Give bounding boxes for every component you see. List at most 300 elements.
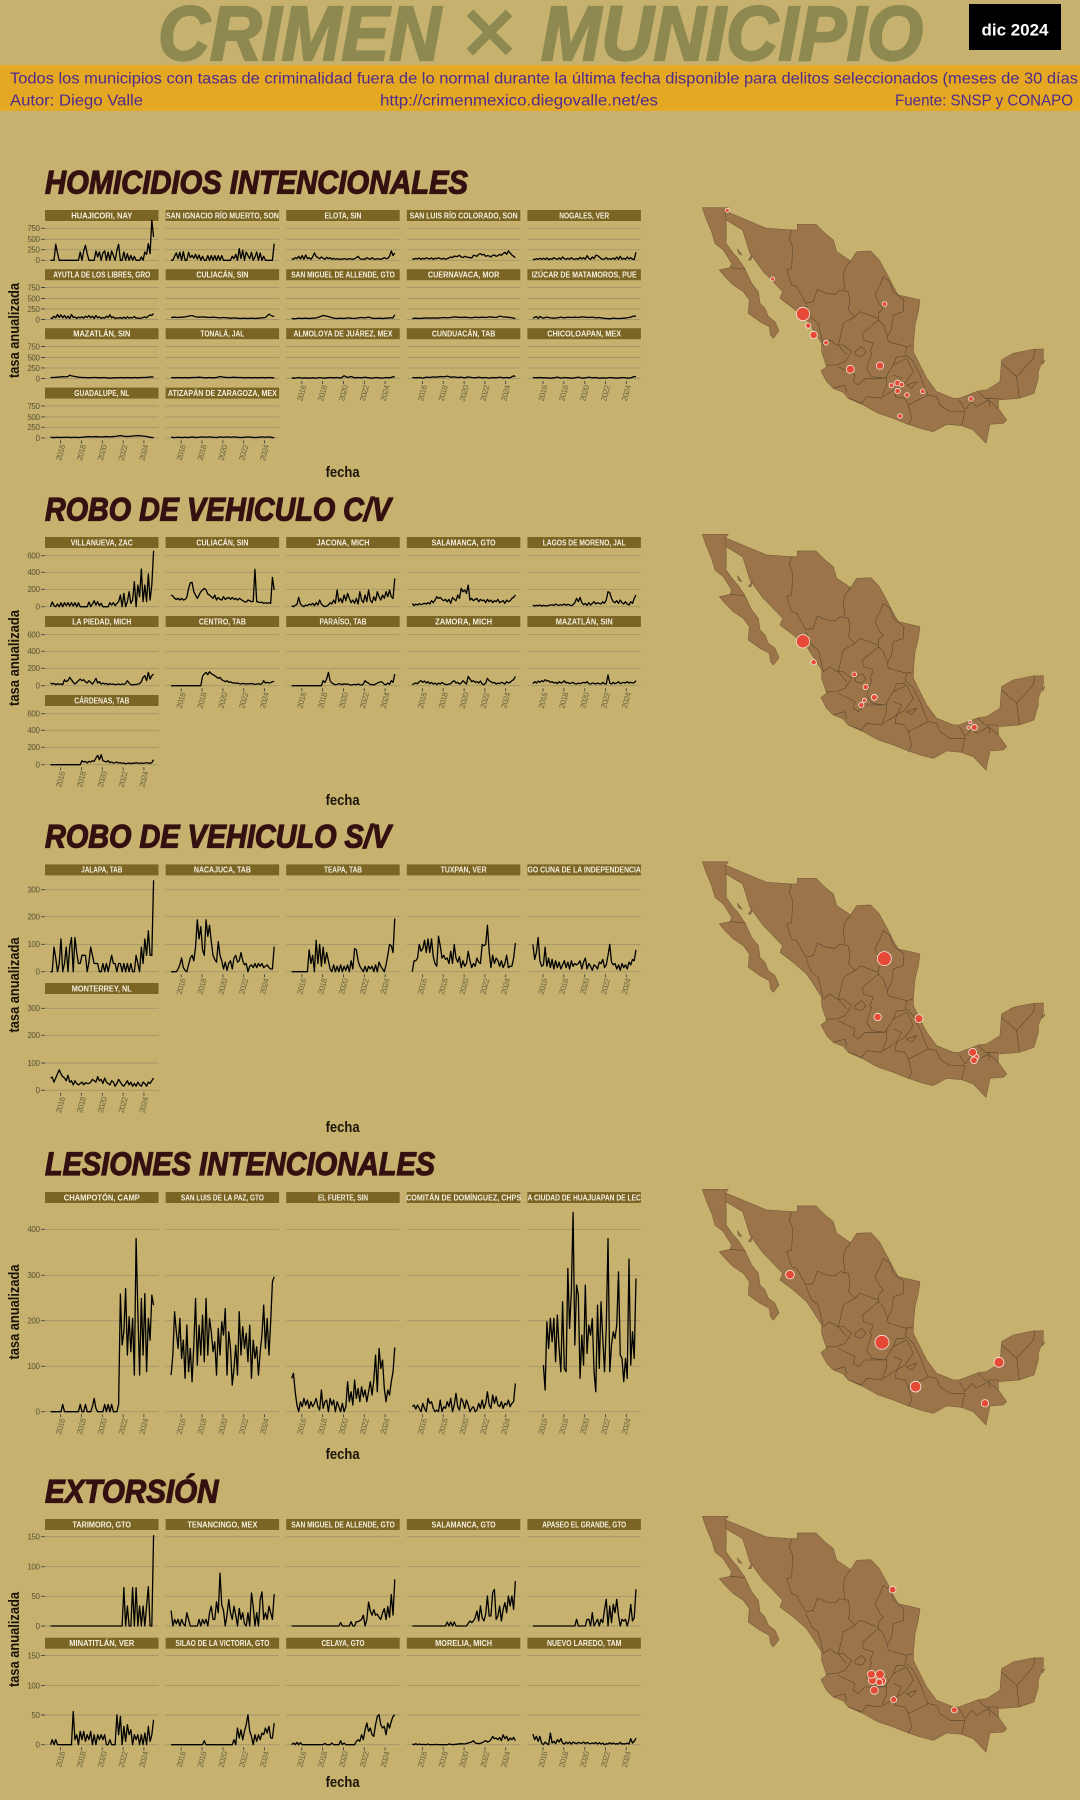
year axis [175,688,271,709]
year axis: 2020 [217,977,230,995]
y axis labels: 250 [27,246,40,255]
panel: Tarimoro [45,1519,158,1626]
year axis: 2016 [54,1417,67,1435]
heading: ROBO DE VEHICULO S/V [45,819,393,855]
section: lesiones intencionales [6,1146,1045,1463]
y axis labels: 200 [27,913,40,922]
year axis: 2022 [358,1417,371,1435]
year axis: 2018 [557,384,571,402]
year axis: 2018 [437,977,450,995]
panel: Tenancingo: TENANCINGO, MEX [187,1519,258,1529]
year axis: 2018 [75,770,88,788]
y axis labels: 750 [27,224,40,233]
y axis labels: 150 [27,1533,40,1542]
year axis [175,440,271,462]
year axis: 2018 [437,691,450,709]
panel: Silao de la Victoria: SILAO DE LA VICTORIA, GTO [175,1638,270,1648]
y axis labels [27,1225,45,1417]
panel: Apaseo el Grande: APASEO EL GRANDE, GTO [542,1519,626,1529]
year axis: 2020 [337,977,350,995]
year axis [54,1747,151,1768]
section: extorsión [6,1472,1045,1791]
panel: Zamora: ZAMORA, MICH [435,616,492,626]
year axis: 2018 [75,1417,88,1435]
y axis labels: 0 [35,968,40,977]
panel: San Luis Río Colorado: SAN LUIS RÍO COLORADO, SON [410,210,518,220]
panel: Salamanca: SALAMANCA, GTO [432,537,496,547]
year axis: 2020 [217,443,230,462]
panel: Tenancingo [166,1519,279,1626]
subtitle band [0,65,1080,111]
panel: Mazatlán [45,328,158,378]
panel: Nogales: NOGALES, VER [559,210,610,220]
panel: Ayutla de los Libres: AYUTLA DE LOS LIBRES, GRO [53,270,151,280]
y axis labels [27,552,45,770]
panel: Morelia [407,1638,520,1745]
year axis: 2022 [479,1417,492,1435]
year axis: 2022 [599,691,612,709]
year axis: 2020 [96,1750,109,1768]
heading: ROBO DE VEHICULO C/V [45,492,393,528]
year axis: 2016 [54,1750,67,1768]
year axis: 2020 [217,1417,230,1435]
y axis title: tasa anualizada [6,282,23,378]
year axis [54,1414,151,1435]
year axis: 2022 [599,384,612,402]
panel: Dolores Hidalgo (clipped label): GO CUNA DE LA INDEPENDENCIA [528,865,641,875]
panel: Silao de la Victoria [166,1638,279,1745]
panel: Ayutla de los Libres [45,269,158,320]
year axis: 2016 [537,977,550,995]
panel: Salamanca ext [407,1519,520,1626]
panel: Comitán de Domínguez [406,1192,521,1412]
year axis: 2022 [479,691,492,709]
year axis: 2024 [379,1750,392,1768]
panel: Monterrey: MONTERREY, NL [72,983,132,993]
year axis [54,767,151,788]
year axis: 2018 [557,691,571,709]
year axis: 2018 [437,1417,450,1435]
panel: Lagos de Moreno: LAGOS DE MORENO, JAL [543,537,626,547]
year axis [54,1093,151,1114]
date badge [969,4,1061,50]
panel: Cárdenas [45,695,158,765]
year axis: 2022 [479,977,492,995]
heading: LESIONES INTENCIONALES [45,1146,435,1182]
date badge: dic 2024 [982,22,1049,40]
year axis [537,1414,633,1435]
year axis: 2016 [416,977,429,995]
year axis: 2018 [196,443,209,462]
year axis: 2022 [599,977,612,995]
y axis labels: 0 [35,682,40,691]
panel: Cárdenas: CÁRDENAS, TAB [74,695,129,705]
panel: Lagos de Moreno [527,537,641,607]
panel: Centro [166,616,279,686]
panel: Guadalupe [45,388,158,438]
panel: Nuevo Laredo [527,1638,641,1745]
year axis: 2016 [295,1750,309,1768]
panel: Culiacán [166,269,279,320]
panel: Cunduacán [407,328,520,378]
panel: Jalapa: JALAPA, TAB [81,865,122,875]
year axis: 2016 [175,1417,188,1435]
y axis labels: 600 [27,552,40,561]
year axis: 2020 [458,691,471,709]
panel: San Ignacio Río Muerto: SAN IGNACIO RÍO MUERTO, SON [166,210,279,220]
year axis: 2018 [316,1750,329,1768]
year axis: 2022 [117,443,130,462]
year axis: 2022 [237,977,250,995]
y axis title: tasa anualizada [6,1591,23,1687]
year axis [416,1414,512,1435]
year axis: 2016 [175,1750,188,1768]
y axis labels: 400 [27,647,40,656]
year axis [175,974,271,995]
panel: Cuernavaca: CUERNAVACA, MOR [428,270,500,280]
heading: EXTORSIÓN [45,1472,220,1509]
panel: Elota: ELOTA, SIN [325,210,362,220]
year axis: 2018 [557,977,571,995]
year axis: 2016 [537,1417,550,1435]
year axis: 2016 [54,770,67,788]
year axis: 2024 [258,1750,271,1768]
y axis labels: 0 [35,761,40,770]
year axis: 2022 [237,691,250,709]
panel: La Piedad [45,616,158,686]
panel: El Fuerte [286,1192,400,1412]
year axis: 2016 [295,977,309,995]
year axis: 2018 [557,1417,571,1435]
panel: Culiacán: CULIACÁN, SIN [196,270,248,280]
panel: Cuernavaca [407,269,520,320]
map: homicidios [702,208,1045,443]
y axis labels: 150 [27,1651,40,1660]
y axis labels: 100 [27,1362,40,1371]
panel: Minatitlán [45,1638,158,1745]
panel: Zamora [407,616,520,686]
year axis: 2024 [499,1750,512,1768]
panel: Guadalupe: GUADALUPE, NL [74,388,129,398]
heading: HOMICIDIOS INTENCIONALES [45,164,468,200]
map: robo s/v [702,862,1045,1097]
year axis: 2024 [499,977,512,995]
y axis labels: 500 [27,413,40,422]
year axis [537,381,633,402]
year axis: 2018 [437,384,450,402]
year axis: 2016 [537,1750,550,1768]
x axis title: fecha [326,1446,360,1463]
panel: Teapa: TEAPA, TAB [324,865,362,875]
year axis: 2016 [295,1417,309,1435]
year axis: 2024 [138,1417,151,1435]
panel: San Luis Río Colorado [407,210,520,260]
year axis: 2020 [217,691,230,709]
y axis labels: 500 [27,353,40,362]
y axis labels: 200 [27,664,40,673]
y axis labels: 200 [27,743,40,752]
year axis: 2024 [138,1750,151,1768]
panel: Centro: CENTRO, TAB [199,616,246,626]
y axis labels: 500 [27,235,40,244]
panel: Nogales [527,210,641,260]
y axis labels: 0 [35,603,40,612]
y axis labels: 250 [27,305,40,314]
year axis: 2024 [138,1095,151,1114]
year axis: 2018 [196,1750,209,1768]
year axis: 2016 [54,443,67,462]
y axis labels: 0 [35,434,40,443]
panel: Dolores Hidalgo (clipped label) [527,864,641,972]
panel: Jacona: JACONA, MICH [317,537,370,547]
year axis: 2020 [578,1417,591,1435]
year axis: 2024 [620,977,633,995]
panel: Elota [286,210,400,260]
year axis [537,974,633,995]
panel: San Luis de la Paz [166,1192,279,1412]
panel: Huajicori: HUAJICORI, NAY [71,210,133,220]
year axis: 2018 [316,1417,329,1435]
year axis: 2022 [237,443,250,462]
year axis: 2016 [416,691,429,709]
year axis [537,1747,633,1768]
panel: Chicoloapan [527,328,641,378]
y axis labels: 100 [27,1563,40,1572]
year axis: 2018 [196,1417,209,1435]
y axis labels: 50 [31,1711,40,1720]
year axis: 2018 [75,1095,88,1114]
year axis: 2022 [237,1750,250,1768]
panel: La Piedad: LA PIEDAD, MICH [72,616,131,626]
panel: Jacona [286,537,400,607]
y axis labels: 0 [35,374,40,383]
year axis [295,688,392,709]
year axis: 2022 [358,977,371,995]
year axis: 2024 [620,691,633,709]
year axis: 2018 [75,1750,88,1768]
year axis: 2020 [458,384,471,402]
year axis: 2018 [316,977,329,995]
panel: San Miguel de Allende ext [286,1519,400,1626]
panel: Mazatlán robo: MAZATLÁN, SIN [556,616,613,626]
panel: Huajicori [45,210,158,260]
year axis: 2018 [316,691,329,709]
year axis: 2016 [416,384,429,402]
panel: Champotón [45,1191,158,1412]
y axis labels: 100 [27,940,40,949]
year axis: 2018 [437,1750,450,1768]
panel: Almoloya de Juárez: ALMOLOYA DE JUÁREZ, MEX [294,329,393,339]
year axis: 2020 [578,1750,591,1768]
panel: Paraíso: PARAÍSO, TAB [320,616,367,626]
panel: Villanueva [45,537,158,607]
year axis [175,1414,271,1435]
panel: Paraíso [286,616,400,686]
y axis labels: 400 [27,726,40,735]
y axis labels: 750 [27,402,40,411]
year axis [295,381,392,402]
year axis: 2024 [258,977,271,995]
y axis labels: 750 [27,283,40,292]
year axis: 2022 [358,1750,371,1768]
panel: San Ignacio Río Muerto [166,210,279,260]
y axis labels: 100 [27,1059,40,1068]
year axis: 2020 [337,1750,350,1768]
panel: Nacajuca: NACAJUCA, TAB [194,865,251,875]
y axis labels: 500 [27,294,40,303]
panel: Teapa [286,864,400,972]
panel: Nacajuca [166,864,279,972]
panel: Almoloya de Juárez [286,328,400,378]
panel: Atizapán de Zaragoza [166,388,279,438]
year axis [416,688,512,709]
panel: Salamanca [407,537,520,607]
y axis labels: 200 [27,585,40,594]
subtitle band: Todos los municipios con tasas de criminalidad fuera de lo normal durante la última fecha disponible para delitos seleccionados (meses de 30 días [10,70,1078,88]
panel: Villanueva: VILLANUEVA, ZAC [71,537,133,547]
panel: Tonalá [166,328,279,378]
year axis: 2020 [96,1417,109,1435]
year axis: 2022 [599,1750,612,1768]
y axis labels: 100 [27,1681,40,1690]
year axis [295,1747,392,1768]
year axis: 2016 [416,1417,429,1435]
y axis title: tasa anualizada [6,1264,23,1360]
y axis labels: 0 [35,1086,40,1095]
panel: Mazatlán robo [527,616,641,686]
year axis [54,440,151,462]
panel: Minatitlán: MINATITLÁN, VER [69,1638,135,1648]
y axis labels: 0 [35,1741,40,1750]
year axis: 2020 [458,977,471,995]
panel: Culiacán robo [166,537,279,607]
year axis: 2016 [295,691,309,709]
panel: Chicoloapan: CHICOLOAPAN, MEX [547,329,621,339]
year axis: 2020 [578,977,591,995]
year axis: 2024 [138,770,151,788]
y axis labels: 250 [27,423,40,432]
panel: Huajuapan de León [527,1192,641,1412]
panel: Mazatlán: MAZATLÁN, SIN [73,329,130,339]
panel: Celaya [286,1638,400,1745]
panel: Huajuapan de León: A CIUDAD DE HUAJUAPAN DE LEC [528,1192,641,1202]
y axis labels: 200 [27,1031,40,1040]
year axis: 2024 [258,1417,271,1435]
map: robo c/v [702,534,1045,770]
year axis: 2018 [557,1750,571,1768]
year axis: 2022 [479,384,492,402]
subtitle band: Autor: Diego Valle [10,92,143,110]
panel: Jalapa [45,864,158,972]
year axis: 2024 [258,443,271,462]
year axis [537,688,633,709]
panel: Atizapán de Zaragoza: ATIZAPÁN DE ZARAGOZA, MEX [168,388,277,398]
year axis: 2020 [337,384,350,402]
y axis labels: 750 [27,342,40,351]
x axis title: fecha [326,792,360,809]
y axis labels: 300 [27,886,40,895]
panel: San Miguel de Allende ext: SAN MIGUEL DE ALLENDE, GTO [291,1519,395,1529]
year axis: 2016 [537,691,550,709]
year axis: 2022 [358,691,371,709]
year axis: 2020 [337,1417,350,1435]
year axis: 2020 [458,1750,471,1768]
year axis: 2016 [295,384,309,402]
year axis: 2024 [620,1750,633,1768]
year axis: 2022 [117,1095,130,1114]
y axis labels: 0 [35,315,40,324]
year axis: 2016 [416,1750,429,1768]
subtitle band: http://crimenmexico.diegovalle.net/es [380,92,658,110]
year axis: 2024 [620,1417,633,1435]
panel: San Luis de la Paz: SAN LUIS DE LA PAZ, GTO [181,1192,264,1202]
year axis: 2022 [117,770,130,788]
year axis: 2020 [96,443,109,462]
panel: Cunduacán: CUNDUACÁN, TAB [432,329,495,339]
panel: Champotón: CHAMPOTÓN, CAMP [64,1191,140,1202]
year axis: 2016 [175,977,188,995]
year axis: 2020 [578,691,591,709]
year axis [416,974,512,995]
panel: Nuevo Laredo: NUEVO LAREDO, TAM [547,1638,621,1648]
map: lesiones [702,1189,1045,1425]
year axis [175,1747,271,1768]
year axis: 2024 [499,691,512,709]
panel: San Miguel de Allende: SAN MIGUEL DE ALLENDE, GTO [291,270,395,280]
panel: Izúcar de Matamoros: IZÚCAR DE MATAMOROS, PUE [532,269,637,280]
year axis [416,381,512,402]
year axis: 2016 [54,1095,67,1114]
year axis: 2022 [358,384,371,402]
year axis: 2020 [96,1095,109,1114]
y axis labels: 300 [27,1271,40,1280]
y axis title: tasa anualizada [6,609,23,706]
year axis: 2018 [316,384,329,402]
year axis: 2024 [499,1417,512,1435]
y axis labels: 600 [27,631,40,640]
year axis: 2018 [196,977,209,995]
panel: Monterrey [45,983,158,1090]
panel: Tuxpan: TUXPAN, VER [441,865,487,875]
year axis: 2024 [138,443,151,462]
panel: Celaya: CELAYA, GTO [322,1638,365,1648]
y axis title: tasa anualizada [6,937,23,1032]
panel: Morelia: MORELIA, MICH [435,1638,492,1648]
y axis labels: 0 [35,1622,40,1631]
x axis title: fecha [326,1774,360,1791]
y axis labels: 600 [27,710,40,719]
year axis: 2024 [620,384,633,402]
y axis labels: 400 [27,568,40,577]
year axis [416,1747,512,1768]
year axis: 2016 [175,443,188,462]
year axis: 2020 [337,691,350,709]
x axis title: fecha [326,1119,360,1136]
section: robo de vehiculo s/v [6,819,1045,1136]
panel: Comitán de Domínguez: COMITÁN DE DOMÍNGUEZ, CHPS [406,1192,521,1202]
year axis: 2020 [578,384,591,402]
panel: Izúcar de Matamoros [527,268,641,320]
year axis: 2018 [196,691,209,709]
panel: El Fuerte: EL FUERTE, SIN [318,1192,368,1202]
y axis labels: 250 [27,364,40,373]
year axis: 2024 [379,977,392,995]
panel: Apaseo el Grande [527,1519,641,1626]
year axis: 2022 [237,1417,250,1435]
y axis labels: 400 [27,1225,40,1234]
main title [158,0,923,85]
y axis labels: 0 [35,1408,40,1417]
